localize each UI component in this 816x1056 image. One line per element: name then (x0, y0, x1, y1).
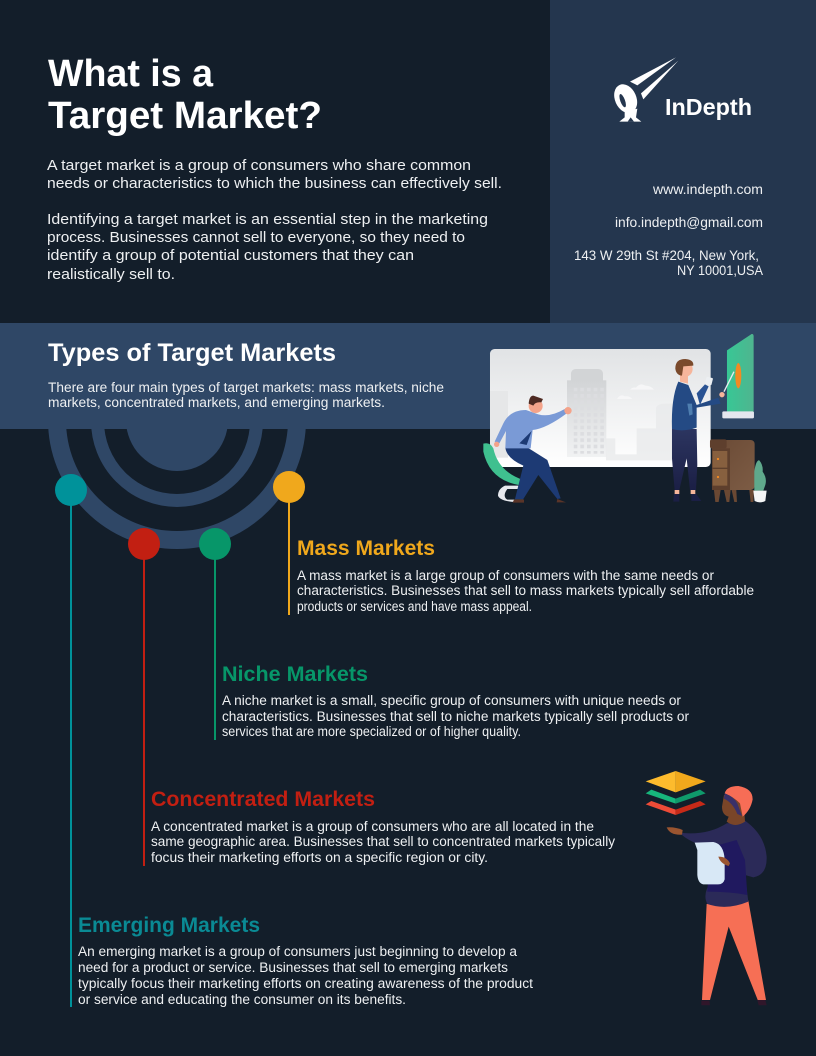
section: emerging markets: An emerging market is a group of consumers just beginning to develop a (78, 944, 518, 959)
section: emerging markets: or service and educating the consumer on its benefits. (78, 992, 406, 1007)
marker: mass markets pin (273, 471, 305, 615)
intro text block: Identifying a target market is an essential step in the marketing (47, 211, 488, 228)
section: emerging markets (78, 914, 533, 1007)
section: mass markets: characteristics. Businesses that sell to mass markets typically sell affordable (297, 583, 754, 598)
intro text block: needs or characteristics to which the business can effectively sell. (47, 175, 502, 192)
whiteboard (490, 349, 711, 467)
section: concentrated markets: focus their marketing efforts on a specific region or city. (151, 850, 488, 865)
section: emerging markets: Emerging Markets (78, 914, 260, 937)
logo: InDepth (610, 57, 752, 122)
section: concentrated markets: A concentrated market is a group of consumers who are all located in the (151, 819, 594, 834)
section: mass markets: products or services and have mass appeal. (297, 599, 532, 614)
illustration: presentation scene (483, 334, 767, 503)
woman holding paper (667, 786, 767, 1005)
marker: concentrated markets pin (128, 528, 160, 866)
marker: emerging markets pin (55, 474, 87, 1007)
section: mass markets: Mass Markets (297, 537, 435, 560)
section: niche markets: Niche Markets (222, 663, 368, 686)
section: niche markets (222, 663, 690, 739)
section: concentrated markets: same geographic area. Businesses that sell to concentrated markets typically (151, 834, 615, 849)
contact details: info.indepth@gmail.com (615, 215, 763, 230)
section: mass markets: A mass market is a large group of consumers with the same needs or (297, 568, 715, 583)
panel: contact sidebar (550, 0, 816, 323)
illustration: person with layers icon (646, 771, 767, 1005)
wooden cabinet (710, 439, 755, 502)
intro text block: A target market is a group of consumers who share common (47, 157, 471, 174)
man presenting (672, 359, 734, 502)
heading: types of target markets: Types of Target Markets (48, 339, 336, 367)
types intro text: There are four main types of target markets: mass markets, niche (48, 380, 444, 395)
types intro text: markets, concentrated markets, and emerging markets. (48, 395, 385, 410)
title (48, 53, 322, 137)
concentric half circle graphic (57, 420, 297, 540)
contact details: 143 W 29th St #204, New York, (574, 248, 759, 263)
screen on stand (722, 334, 754, 418)
title: Target Market? (48, 95, 322, 137)
potted plant (753, 460, 767, 502)
types intro text (48, 380, 444, 410)
logo wordmark: InDepth (665, 94, 752, 120)
section: niche markets: A niche market is a small, specific group of consumers with unique needs or (222, 693, 682, 708)
section: mass markets (297, 537, 754, 614)
contact details (574, 182, 763, 278)
intro text block (47, 157, 502, 283)
intro text block: process. Businesses cannot sell to everyone, so they need to (47, 229, 465, 246)
intro text block: identify a group of potential customers that they can (47, 247, 414, 264)
contact details: www.indepth.com (652, 182, 763, 197)
man seated in green chair (483, 396, 572, 503)
panel: types band (0, 323, 816, 429)
title: What is a (48, 53, 214, 95)
section: niche markets: characteristics. Businesses that sell to niche markets typically sell products or (222, 709, 690, 724)
contact details: NY 10001,USA (677, 263, 763, 278)
section: emerging markets: typically focus their marketing efforts on creating awareness of the product (78, 976, 533, 991)
section: concentrated markets: Concentrated Markets (151, 788, 375, 811)
icon: satellite dish with beams (610, 57, 678, 122)
section: concentrated markets (151, 788, 615, 865)
intro text block: realistically sell to. (47, 266, 175, 283)
marker: niche markets pin (199, 528, 231, 740)
section: niche markets: services that are more specialized or of higher quality. (222, 724, 521, 739)
icon: stacked layers (646, 771, 706, 815)
section: emerging markets: need for a product or service. Businesses that sell to emerging markets (78, 960, 508, 975)
